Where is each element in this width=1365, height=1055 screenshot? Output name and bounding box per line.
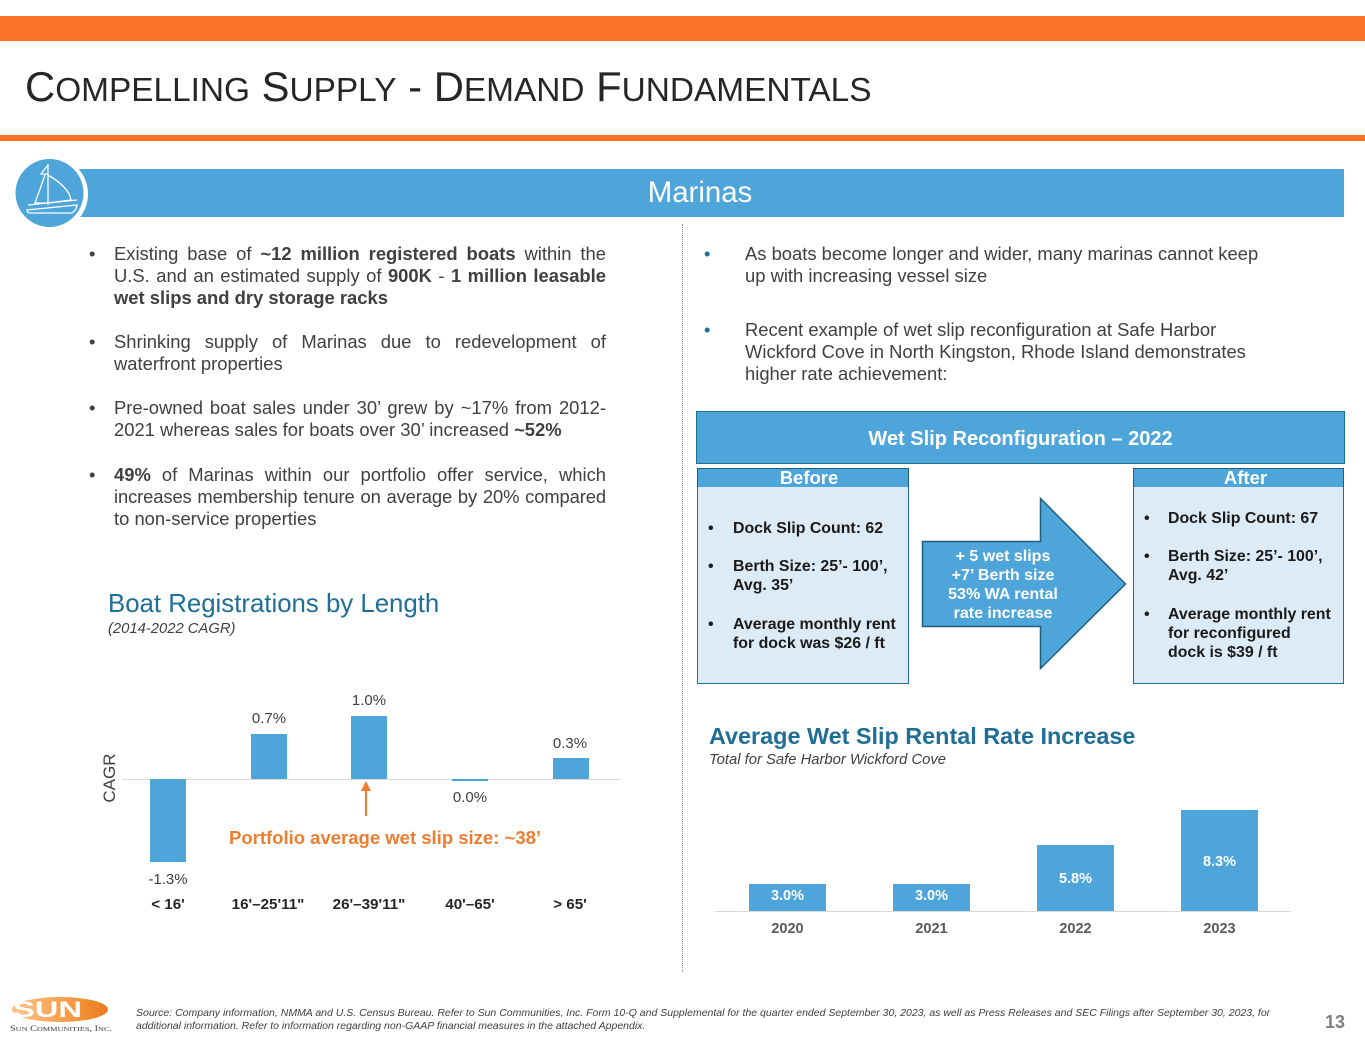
text block: left bullets: Pre-owned boat sales under 30’ grew by ~17% from 2012- <box>114 397 606 418</box>
footnote: Source: Company information, NMMA and U.S. Census Bureau. Refer to Sun Communities, Inc. Form 10-Q and Supplemental for the quarter ended September 30, 2023, as well as Press Releases and SEC Filings after September 30, 2023, for <box>136 1007 1270 1019</box>
panel: before: Berth Size: 25’- 100’, <box>733 558 888 575</box>
text block: left bullets: waterfront properties <box>114 353 283 374</box>
footnote <box>136 1007 1270 1032</box>
panel: before <box>697 467 909 684</box>
bar chart: boat registrations by length <box>100 692 621 913</box>
orange rule under title <box>0 135 1365 141</box>
panel: before: Before <box>780 467 838 488</box>
text block: left bullets: • <box>89 397 95 418</box>
bar chart: average wet slip rental rate increase: 2021 <box>915 921 948 937</box>
bar chart: average wet slip rental rate increase: 8.3% <box>1203 854 1236 870</box>
arrow: change summary <box>922 496 1126 670</box>
page number: 13 <box>1325 1012 1345 1032</box>
bar chart: boat registrations by length: 0.3% <box>553 735 587 752</box>
bar chart: boat registrations by length: 40'–65' <box>445 896 495 913</box>
panel: before: Average monthly rent <box>733 616 896 633</box>
bar chart: boat registrations by length: -1.3% <box>148 871 188 888</box>
bar chart: boat registrations by length: 0.0% <box>453 789 487 806</box>
section banner: Marinas: Marinas <box>648 176 752 209</box>
chart heading: boat registrations <box>108 590 439 637</box>
panel heading: wet slip reconfiguration: Wet Slip Reconfiguration – 2022 <box>868 428 1173 450</box>
bar chart: boat registrations by length: 1.0% <box>352 692 386 709</box>
arrow: change summary: + 5 wet slips <box>956 548 1050 565</box>
text block: left bullets: increases membership tenure on average by 20% compared <box>114 486 606 507</box>
bar chart: boat registrations by length: 0.7% <box>252 710 286 727</box>
text block: right bullets: Recent example of wet slip reconfiguration at Safe Harbor <box>745 319 1216 340</box>
text block: left bullets: 49% of Marinas within our portfolio offer service, which <box>114 464 606 485</box>
icon: sailboat <box>16 159 88 227</box>
panel: before: • <box>708 558 714 575</box>
text block: left bullets: Shrinking supply of Marinas due to redevelopment of <box>114 331 606 352</box>
panel: after: • <box>1144 510 1150 527</box>
panel: after: Dock Slip Count: 67 <box>1168 510 1318 527</box>
arrow: change summary: 53% WA rental <box>948 586 1058 603</box>
panel: before: Dock Slip Count: 62 <box>733 520 883 537</box>
text block: right bullets: As boats become longer and wider, many marinas cannot keep <box>745 243 1258 264</box>
panel: after: dock is $39 / ft <box>1168 644 1278 661</box>
bar chart: boat registrations by length: 16'–25'11" <box>232 896 304 913</box>
panel heading: wet slip reconfiguration <box>696 411 1345 464</box>
footnote: additional information. Refer to information regarding non-GAAP financial measures in the attached Appendix. <box>136 1020 645 1032</box>
bar chart: boat registrations by length: < 16' <box>151 896 185 913</box>
chart heading: boat registrations: (2014-2022 CAGR) <box>108 621 235 637</box>
logo: Sun Communities: SUN <box>13 997 82 1022</box>
panel: after: for reconfigured <box>1168 625 1291 642</box>
text block: right bullets <box>704 243 1258 384</box>
panel: after: Average monthly rent <box>1168 606 1331 623</box>
panel: before: • <box>708 616 714 633</box>
bar chart: average wet slip rental rate increase: 2023 <box>1203 921 1236 937</box>
panel: before: • <box>708 520 714 537</box>
text block: left bullets: wet slips and dry storage racks <box>114 287 388 308</box>
panel: before: for dock was $26 / ft <box>733 635 885 652</box>
chart heading: rental rate increase: Total for Safe Harbor Wickford Cove <box>709 752 946 768</box>
text block: left bullets: • <box>89 331 95 352</box>
chart heading: rental rate increase: Average Wet Slip Rental Rate Increase <box>709 723 1135 749</box>
bar chart: average wet slip rental rate increase: 3.0% <box>915 888 948 904</box>
divider <box>682 224 683 972</box>
bar chart: boat registrations by length: 26'–39'11" <box>333 896 405 913</box>
text block: left bullets: to non-service properties <box>114 508 316 529</box>
chart heading: rental rate increase <box>709 723 1135 768</box>
panel: after: Avg. 42’ <box>1168 567 1228 584</box>
logo: Sun Communities <box>10 997 112 1033</box>
panel: after: • <box>1144 548 1150 565</box>
chart heading: boat registrations: Boat Registrations by Length <box>108 590 439 618</box>
arrow: change summary: rate increase <box>954 605 1052 622</box>
text block: left bullets: 2021 whereas sales for boats over 30’ increased ~52% <box>114 419 562 440</box>
text block: left bullets <box>89 243 606 529</box>
bar chart: boat registrations by length: > 65' <box>553 896 587 913</box>
text block: right bullets: Wickford Cove in North Kingston, Rhode Island demonstrates <box>745 341 1246 362</box>
section banner: Marinas <box>55 169 1344 217</box>
bar chart: average wet slip rental rate increase: 2022 <box>1059 921 1092 937</box>
text block: left bullets: • <box>89 464 95 485</box>
bar chart: average wet slip rental rate increase: 2020 <box>771 921 804 937</box>
panel: before: Avg. 35’ <box>733 577 793 594</box>
text block: left bullets: • <box>89 243 95 264</box>
bar chart: average wet slip rental rate increase: 5.8% <box>1059 871 1092 887</box>
text block: right bullets: up with increasing vessel size <box>745 265 987 286</box>
panel: after: Berth Size: 25’- 100’, <box>1168 548 1323 565</box>
arrow: change summary: +7’ Berth size <box>952 567 1054 584</box>
panel: after <box>1133 467 1344 684</box>
text block: left bullets: U.S. and an estimated supply of 900K - 1 million leasable <box>114 265 606 286</box>
text block: left bullets: Existing base of ~12 million registered boats within the <box>114 243 606 264</box>
text block: right bullets: • <box>704 319 710 340</box>
logo: Sun Communities: SUN C OMMUNITIES , I NC . <box>10 1024 112 1033</box>
top orange band <box>0 16 1365 41</box>
callout: portfolio average slip size: Portfolio average wet slip size: ~38’ <box>229 827 541 848</box>
text block: right bullets: • <box>704 243 710 264</box>
arrow: portfolio average marker <box>361 781 371 816</box>
text block: right bullets: higher rate achievement: <box>745 363 947 384</box>
bar chart: average wet slip rental rate increase: 3.0% <box>771 888 804 904</box>
axis title: CAGR <box>100 753 119 803</box>
panel: after: • <box>1144 606 1150 623</box>
title: COMPELLING SUPPLY - DEMAND FUNDAMENTALS <box>25 63 871 110</box>
panel: after: After <box>1224 467 1267 488</box>
bar chart: average wet slip rental rate increase <box>715 810 1291 937</box>
